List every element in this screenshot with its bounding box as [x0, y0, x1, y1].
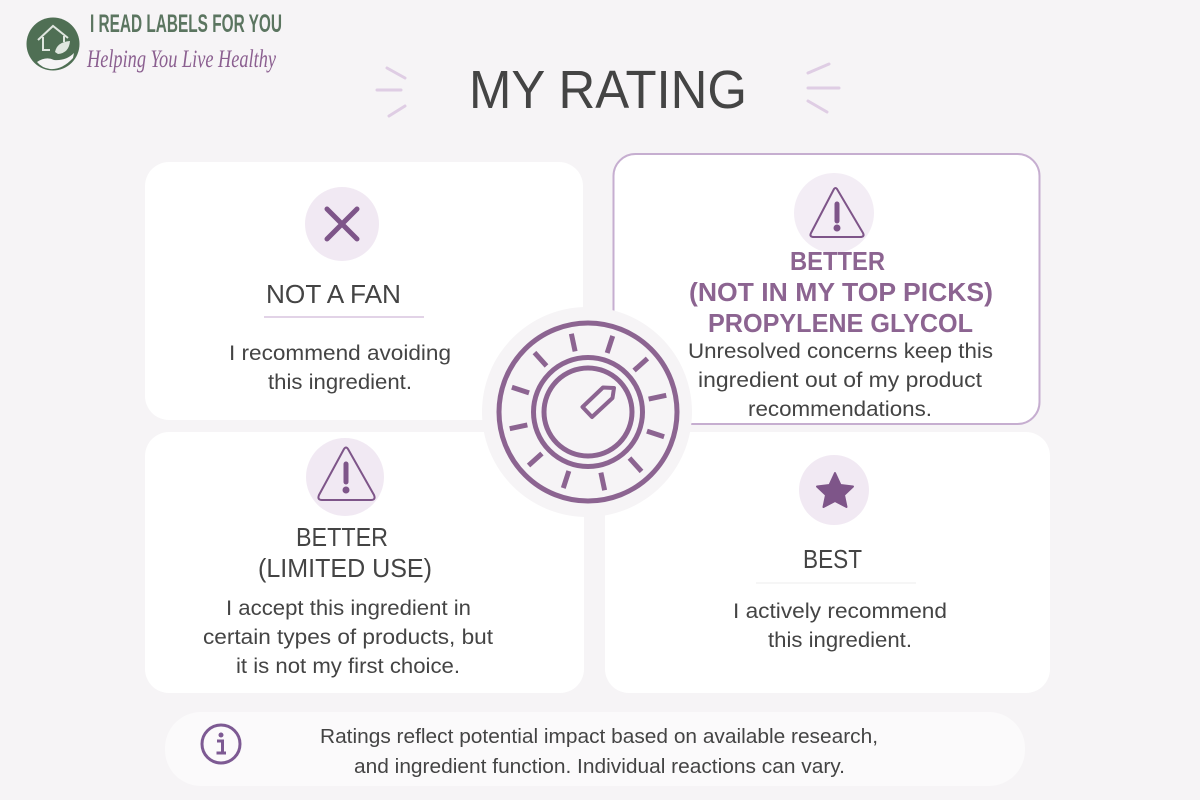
heading: better not in my top picks propylene glycol: PROPYLENE GLYCOL — [708, 308, 973, 338]
text: best description: this ingredient. — [768, 629, 912, 652]
text: limited use description: I accept this ingredient in — [226, 597, 471, 620]
text: top picks description: ingredient out of my product — [698, 369, 982, 392]
logo — [26, 10, 282, 73]
icon: information — [202, 725, 240, 763]
panel: best — [605, 432, 1050, 693]
icon: cross — [305, 187, 379, 261]
text: limited use description — [203, 597, 493, 678]
text: top picks description — [688, 340, 993, 421]
icon: left title sparks — [377, 68, 405, 116]
icon: star — [799, 455, 869, 525]
text: not a fan description: I recommend avoiding — [229, 342, 451, 365]
title: MY RATING — [469, 60, 747, 120]
heading: best: BEST — [803, 544, 862, 574]
panel: better, not in my top picks — [614, 154, 1040, 424]
panel: not a fan — [145, 162, 583, 420]
text: limited use description: it is not my first choice. — [236, 655, 460, 678]
icon: right title sparks — [808, 64, 839, 112]
brand name: I READ LABELS FOR YOU — [90, 10, 282, 38]
icon: warning triangle — [794, 173, 874, 253]
heading: better not in my top picks propylene glycol: BETTER — [790, 246, 885, 276]
heading: better limited use: BETTER — [296, 522, 388, 552]
text: best description: I actively recommend — [733, 600, 947, 623]
icon: central rating dial — [482, 307, 692, 517]
text: limited use description: certain types of products, but — [203, 626, 493, 649]
text: top picks description: Unresolved concerns keep this — [688, 340, 993, 363]
callout: ratings note — [165, 712, 1025, 786]
heading: better limited use — [258, 522, 432, 583]
text: top picks description: recommendations. — [748, 398, 932, 421]
text: ratings note — [320, 726, 878, 778]
tagline: Helping You Live Healthy — [86, 46, 277, 73]
text: ratings note: Ratings reflect potential impact based on available research, — [320, 726, 878, 748]
heading: not a fan: NOT A FAN — [266, 279, 401, 309]
text: not a fan description: this ingredient. — [268, 371, 412, 394]
heading: better limited use: (LIMITED USE) — [258, 553, 432, 583]
panel: better, limited use — [145, 432, 584, 693]
text: best description — [733, 600, 947, 652]
icon: warning triangle — [306, 438, 384, 516]
icon: house and hand logo mark — [26, 18, 80, 70]
text: ratings note: and ingredient function. Individual reactions can vary. — [354, 756, 845, 778]
heading: better not in my top picks propylene glycol: (NOT IN MY TOP PICKS) — [689, 277, 993, 307]
text: not a fan description — [229, 342, 451, 394]
heading: better not in my top picks propylene glycol — [689, 246, 993, 338]
